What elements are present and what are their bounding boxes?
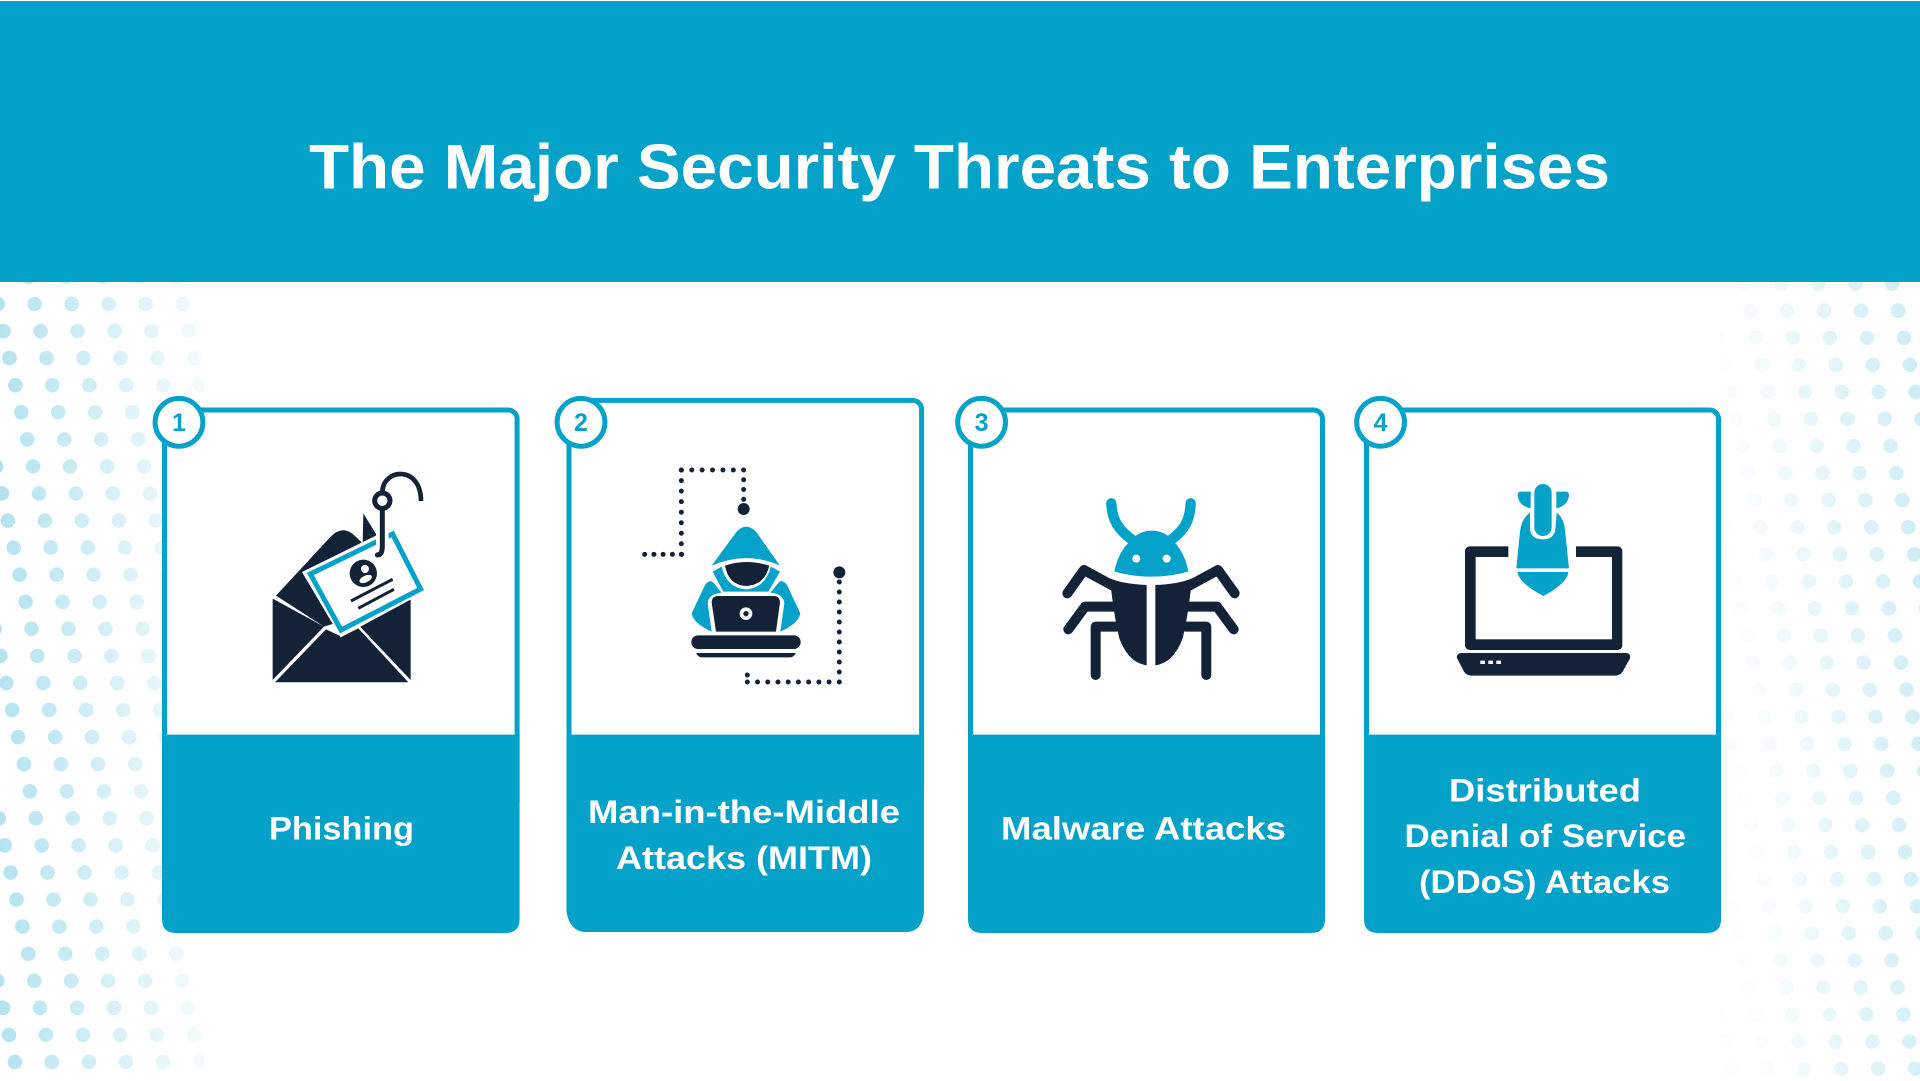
label background [968,735,1325,933]
label: (DDoS) Attacks [1419,864,1670,900]
number badge 2: 2 [574,409,588,437]
card frame [164,410,517,810]
panel: malware [958,398,1325,933]
number badge 4 [1357,398,1404,446]
label background [566,735,924,932]
number badge 3: 3 [975,409,989,437]
label [1404,772,1686,900]
number badge 1 [155,398,203,446]
label: Denial of Service [1404,818,1686,854]
title: The Major Security Threats to Enterprises [309,133,1610,203]
number badge 3 [958,398,1005,446]
icon: hooded hacker [645,470,845,682]
icon: phishing envelope and hook [273,474,428,682]
panel: phishing [155,398,520,933]
card frame [569,400,922,800]
label [588,794,900,876]
label: Attacks (MITM) [616,840,872,876]
label: Distributed [1449,772,1641,808]
icon: bug [1067,503,1235,675]
label background [1364,735,1721,933]
label: Man-in-the-Middle [588,794,900,830]
number badge 2 [557,398,605,446]
label: Malware Attacks [1001,811,1286,847]
header banner [0,1,1920,282]
label: Phishing [269,811,414,847]
number badge 4: 4 [1374,409,1388,437]
number badge 1: 1 [172,409,186,437]
panel: ddos [1357,398,1721,933]
card frame [970,410,1322,810]
icon: bomb over laptop [1457,484,1630,676]
card frame [1366,410,1718,810]
panel: man-in-the-middle [557,398,924,932]
label background [162,735,520,933]
